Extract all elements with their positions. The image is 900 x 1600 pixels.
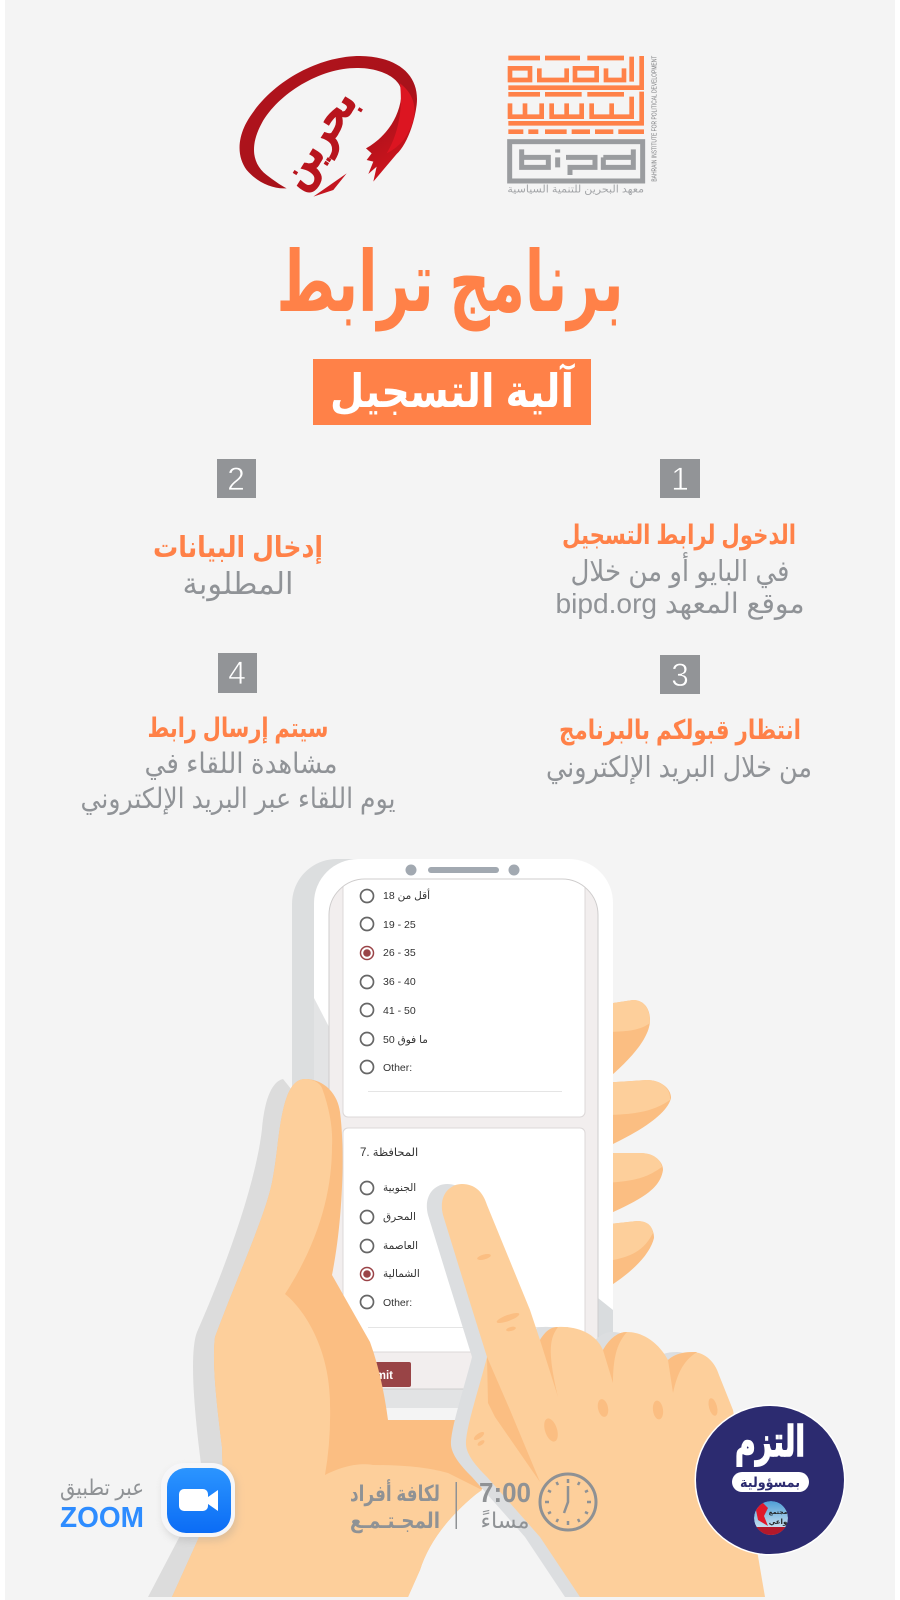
form card: governorate: الشمالية [383, 1268, 420, 1280]
form card: age: 26 - 35 [383, 947, 416, 959]
form card: governorate: العاصمة [383, 1240, 418, 1252]
form card: age: 41 - 50 [383, 1005, 416, 1017]
form card: age: 36 - 40 [383, 976, 416, 988]
right hand [427, 1184, 765, 1597]
phone shadow [292, 859, 500, 1408]
community logo: مجتمع [769, 1510, 788, 1516]
form card: governorate [343, 1128, 585, 1352]
form card: age: أقل من 18 [383, 888, 430, 902]
zoom text: عبر تطبيق [60, 1475, 144, 1501]
community logo [754, 1501, 788, 1535]
institute arabic name: معهد البحرين للتنمية السياسية [507, 185, 644, 196]
step 4: يوم اللقاء عبر البريد الإلكتروني [80, 783, 396, 815]
step 4 [80, 653, 396, 815]
step 3: من خلال البريد الإلكتروني [546, 752, 812, 785]
audience text: المجـتـمـع [350, 1508, 440, 1534]
phone body [314, 859, 613, 1408]
left hand light [172, 1079, 482, 1597]
community logo: واعي [769, 1519, 787, 1526]
left hand shadow [148, 1079, 300, 1597]
form card: age: 19 - 25 [383, 919, 416, 931]
time text: 7:00 [479, 1477, 531, 1508]
bipd box [510, 142, 643, 181]
left hand [148, 1079, 482, 1597]
logo: BIPD institute [507, 55, 658, 196]
time text [479, 1477, 531, 1533]
badge headline: التزم [735, 1418, 805, 1467]
right hand shadow [426, 1184, 682, 1597]
icon: zoom app [161, 1463, 237, 1541]
badge pill: بمسؤولية [740, 1474, 800, 1491]
submit button [376, 1362, 411, 1387]
form card: age [343, 860, 585, 1117]
logo: Bahrain red ribbon: بحرين [267, 80, 368, 198]
audience text: لكافة أفراد [350, 1478, 440, 1507]
step 2 [153, 459, 323, 601]
step 1 [556, 459, 804, 620]
badge: commit responsibly [694, 1404, 846, 1556]
step 1: الدخول لرابط التسجيل [562, 520, 796, 551]
form card: governorate: المحافظة .7 [360, 1147, 418, 1159]
step 3: 3 [671, 657, 689, 693]
step 4: 4 [228, 655, 246, 691]
badge pill [732, 1472, 809, 1492]
subtitle banner [313, 359, 591, 425]
step 4: سيتم إرسال رابط [148, 713, 328, 744]
step 2: المطلوبة [182, 568, 294, 601]
time text: مساءً [480, 1508, 530, 1533]
step 1: موقع المعهد bipd.org [556, 588, 804, 620]
step 3 [546, 655, 812, 785]
screen form [329, 860, 598, 1389]
form card: age: ما فوق 50 [383, 1034, 428, 1046]
clock icon [540, 1474, 596, 1530]
submit button: Submit [354, 1370, 393, 1382]
audience text [350, 1478, 457, 1534]
form card: governorate: المحرق [383, 1211, 416, 1223]
form card: age: Other: [383, 1062, 412, 1074]
finger creases and knuckles [473, 1253, 719, 1482]
step 2: إدخال البيانات [153, 532, 323, 565]
form card: governorate: الجنوبية [383, 1182, 416, 1194]
logo: Bahrain red ribbon [240, 56, 417, 198]
zoom text [60, 1475, 144, 1534]
step 1: في البايو أو من خلال [570, 551, 790, 589]
kufic wordmark [508, 56, 644, 132]
step 4: مشاهدة اللقاء في [144, 748, 338, 780]
title: برنامج ترابط [276, 235, 624, 332]
zoom text: ZOOM [60, 1502, 144, 1534]
step 3: انتظار قبولكم بالبرنامج [559, 715, 801, 746]
form card: governorate: Other: [383, 1297, 412, 1309]
camera and speaker [406, 864, 520, 876]
step 1: 1 [671, 461, 689, 497]
subtitle banner: آلية التسجيل [330, 363, 575, 417]
phone [314, 859, 613, 1408]
hand fingers behind phone [600, 1000, 671, 1292]
left hand shade [172, 1079, 482, 1597]
step 2: 2 [227, 461, 245, 497]
right hand base [442, 1184, 765, 1597]
